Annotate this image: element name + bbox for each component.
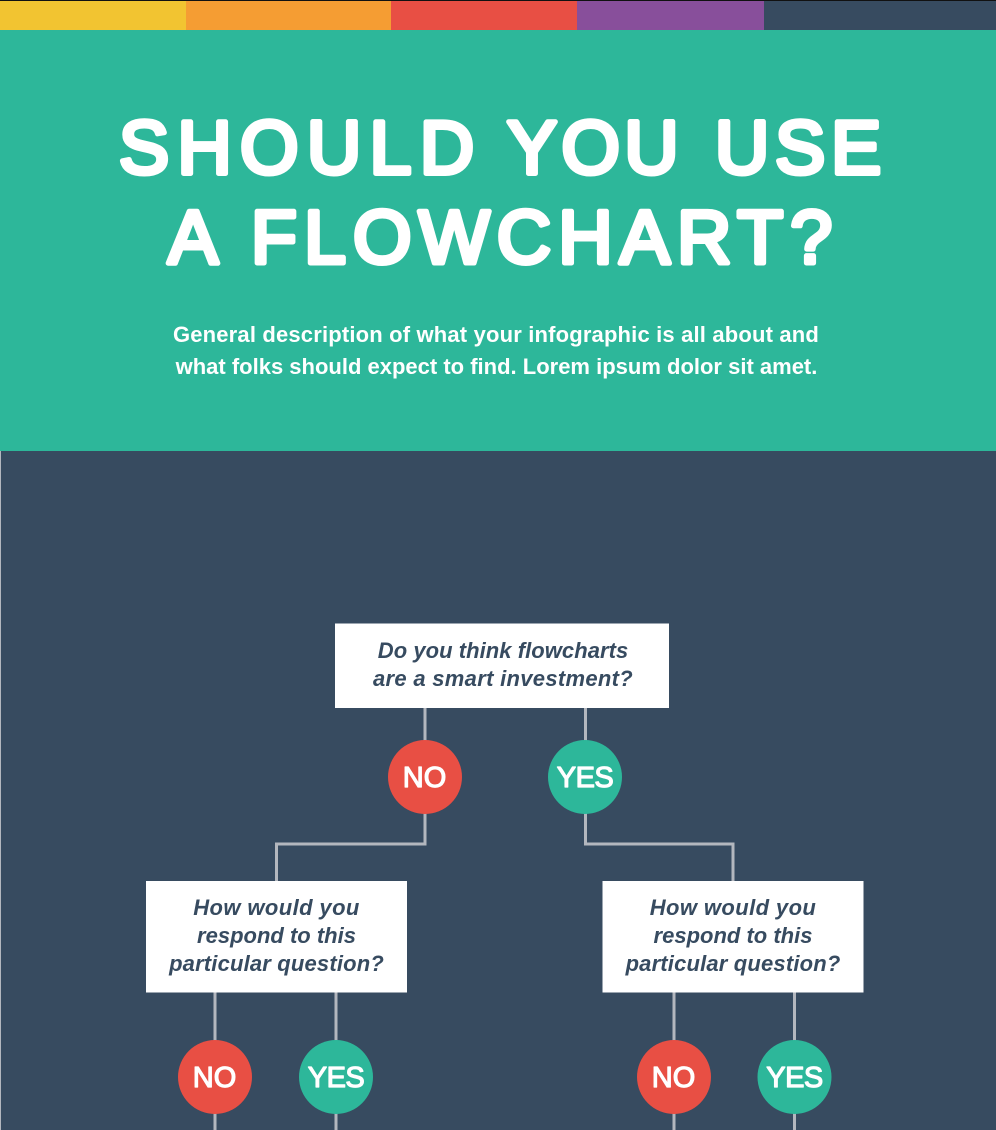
question box: left: particular question? (168, 951, 384, 976)
question box: right: How would you (650, 895, 816, 920)
question box: top: Do you think flowcharts (378, 638, 628, 663)
answer: no (388, 740, 462, 814)
question box: top (335, 624, 669, 708)
question box: top: are a smart investment? (373, 666, 633, 691)
description: what folks should expect to find. Lorem ipsum dolor sit amet. (175, 354, 817, 379)
answer: left yes (299, 1040, 373, 1114)
answer: yes (548, 740, 622, 814)
colour strip (0, 0, 996, 30)
panel: flowchart background (0, 451, 996, 1130)
title: YOU (507, 106, 708, 190)
connector lines (215, 708, 794, 1130)
question box: right: respond to this (654, 923, 812, 948)
question box: left: How would you (193, 895, 360, 920)
answer: left no (178, 1040, 252, 1114)
answer: no: NO (403, 762, 446, 794)
answer: right no: NO (652, 1062, 695, 1094)
answer: right yes: YES (766, 1062, 823, 1094)
question box: right: particular question? (625, 951, 840, 976)
question box: right (602, 881, 864, 992)
question box: left: respond to this (197, 923, 356, 948)
answer: yes: YES (557, 762, 613, 794)
title: FLOWCHART? (251, 195, 839, 279)
title: SHOULD (119, 106, 512, 190)
answer: right no (637, 1040, 711, 1114)
answer: left no: NO (193, 1062, 236, 1094)
question box: left (146, 881, 407, 992)
header panel (0, 30, 996, 451)
answer: left yes: YES (308, 1062, 364, 1094)
title: USE (715, 106, 914, 190)
answer: right yes (758, 1040, 832, 1114)
title: A (168, 195, 235, 279)
description: General description of what your infographic is all about and (173, 322, 819, 347)
